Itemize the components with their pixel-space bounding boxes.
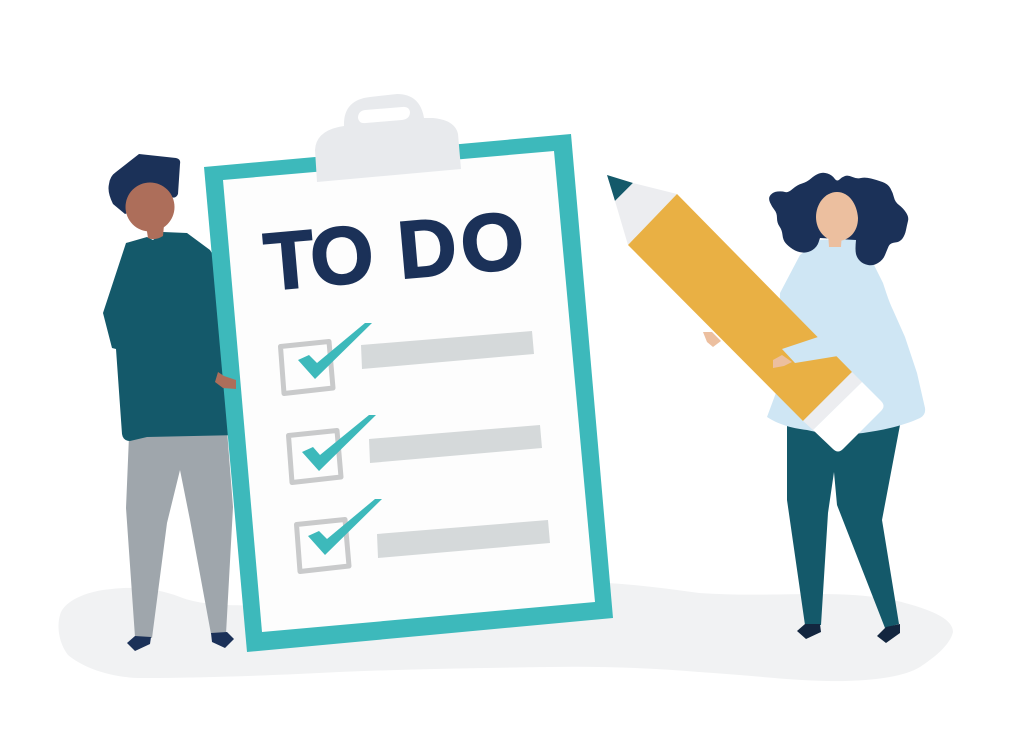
checkbox 2 xyxy=(288,430,341,482)
man sweater xyxy=(103,232,240,441)
pencil xyxy=(607,175,884,452)
woman sweater xyxy=(767,238,925,434)
woman neck xyxy=(828,232,842,247)
man neck xyxy=(146,225,164,239)
title: TO DO: TO DO xyxy=(261,196,528,308)
person: man xyxy=(103,154,240,651)
woman far hand xyxy=(703,332,721,347)
checklist item 3 xyxy=(296,499,550,572)
man hand xyxy=(215,372,236,389)
woman near hand xyxy=(773,355,792,368)
woman hair xyxy=(769,173,908,265)
clipboard frame xyxy=(204,134,613,652)
man hair xyxy=(108,154,180,214)
checkbox 3 xyxy=(296,520,349,572)
ground shadow xyxy=(59,583,953,681)
clipboard xyxy=(204,94,613,652)
man left shoe xyxy=(127,636,151,651)
man right shoe xyxy=(211,632,234,648)
text bar 3 xyxy=(377,520,550,558)
pencil eraser xyxy=(813,382,884,452)
text bar 1 xyxy=(361,331,534,369)
check mark 1 xyxy=(298,323,372,379)
check mark 2 xyxy=(302,415,376,471)
woman left shoe xyxy=(797,624,821,639)
pencil ferrule xyxy=(803,372,862,430)
checklist item 1 xyxy=(280,323,534,394)
person: woman xyxy=(703,173,925,643)
pencil barrel xyxy=(628,194,852,421)
clip xyxy=(315,94,461,182)
man trousers xyxy=(126,430,233,638)
check mark 3 xyxy=(308,499,382,555)
clipboard paper xyxy=(223,151,595,632)
woman trousers xyxy=(787,425,900,628)
checklist item 2 xyxy=(288,415,542,482)
text bar 2 xyxy=(369,425,542,463)
woman right shoe xyxy=(877,624,900,643)
pencil lead xyxy=(607,175,633,201)
woman face xyxy=(816,192,858,241)
pencil wood tip xyxy=(615,183,677,245)
woman near arm xyxy=(782,335,860,375)
man head xyxy=(126,182,174,232)
checkbox 1 xyxy=(280,342,333,394)
